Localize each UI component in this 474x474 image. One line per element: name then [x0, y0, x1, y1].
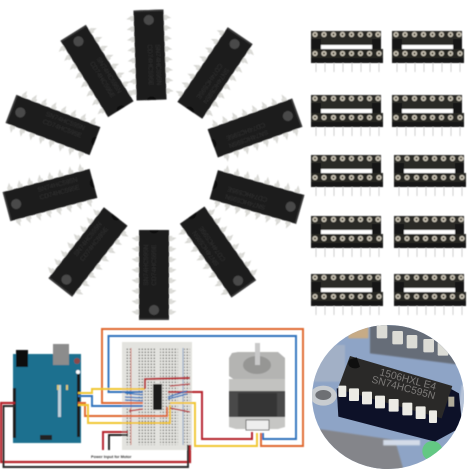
blue jumpers right — [168, 391, 187, 399]
chip: top — [126, 9, 174, 101]
socket: row 2 right — [392, 95, 464, 136]
socket: row 5 left — [311, 274, 383, 315]
orange wire — [78, 403, 167, 416]
chip: upper left — [3, 88, 103, 162]
chip: bottom right — [174, 202, 262, 302]
wires — [0, 329, 303, 467]
chip: right — [205, 91, 305, 165]
socket: row 3 right — [394, 155, 466, 196]
blue wire lower — [78, 396, 143, 406]
grid of ten IC sockets — [311, 31, 466, 315]
capacitor — [310, 386, 337, 406]
socket: row 4 left — [311, 216, 383, 257]
yellow wire top — [78, 389, 145, 393]
chip marking: 1506HXL E4 — [378, 367, 438, 393]
socket: row 3 left — [311, 155, 383, 196]
blurred circuit board background — [314, 325, 464, 469]
chip: bottom — [132, 230, 176, 320]
socket end hole — [448, 397, 454, 407]
Arduino board — [13, 344, 81, 443]
circular photo of chip in socket: SN74HC595N — [370, 375, 436, 402]
red wire to motor — [168, 392, 252, 439]
yellow wire to motor — [170, 403, 257, 446]
chip: lower left — [1, 162, 99, 228]
green LED — [422, 441, 442, 461]
socket: row 1 right — [392, 31, 464, 72]
black ground wire — [4, 406, 188, 467]
chip: bottom left — [43, 203, 133, 301]
chip: upper right — [171, 23, 259, 123]
circular photo of chip in socket — [312, 325, 464, 469]
power input label: Power Input for Motor — [91, 454, 132, 459]
power input red wire — [103, 432, 128, 450]
power input black wire — [109, 435, 128, 450]
socket: row 4 right — [394, 216, 466, 257]
yellow wire lower — [78, 405, 170, 423]
blue jumpers left — [125, 393, 143, 401]
red wire across chip — [145, 378, 190, 389]
wiring diagram — [0, 329, 303, 467]
breadboard — [122, 342, 192, 450]
red jumpers — [129, 384, 190, 412]
upper chip pins — [377, 325, 448, 356]
blue outer wire — [108, 336, 296, 439]
lower chip pins — [338, 386, 437, 423]
red ground-side power wire — [0, 403, 190, 462]
shift register chip on breadboard — [153, 384, 162, 410]
orange outer wire — [102, 329, 303, 446]
ring of ten DIP IC chips — [1, 9, 306, 320]
chip: lower right — [208, 163, 306, 231]
socket base — [337, 388, 462, 442]
chip body — [338, 356, 452, 418]
stepper motor — [229, 343, 285, 430]
socket: row 1 left — [311, 31, 383, 72]
chip: top left — [54, 21, 140, 121]
socket: row 5 right — [394, 274, 466, 315]
socket: row 2 left — [311, 95, 383, 136]
